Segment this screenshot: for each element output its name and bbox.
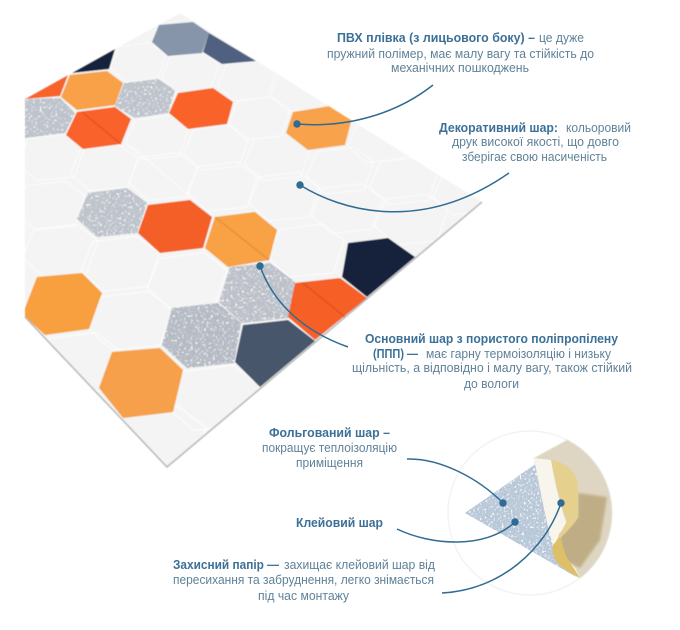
callout text: polypropylene base layer: щільність, а відповідно і малу вагу, також стійкий [352, 360, 632, 375]
panel: hexagon wall panel [15, 13, 503, 475]
arrow: decorative layer leader [296, 173, 509, 212]
callout text: PVC film: це дуже [539, 30, 584, 45]
panel surface [25, 13, 482, 467]
arrow: base layer leader [256, 262, 348, 347]
callout text: decorative layer: кольоровий [566, 120, 631, 135]
paper curl lower lobe [553, 537, 580, 578]
arrow: adhesive layer leader [397, 518, 519, 542]
callout text: decorative layer: Декоративний шар: [439, 120, 558, 135]
textured paper shadow [560, 493, 607, 568]
coloured hexagons [25, 22, 415, 418]
callout text: polypropylene base layer: має гарну термоізоляцію і низьку [426, 346, 611, 361]
callout text: decorative layer [439, 120, 631, 164]
callout text: protective paper: захищає клейовий шар від [284, 557, 435, 572]
peeled white strip [534, 458, 567, 545]
arrow: PVC film leader [293, 85, 433, 128]
white hexagon relief grid [83, 194, 206, 430]
arrow: foil layer leader [407, 459, 507, 507]
callout text: foil layer: Фольгований шар – [269, 425, 390, 440]
callout text: PVC film: пружний полімер, має малу вагу та стійкість до [327, 46, 594, 61]
magnifier ring [448, 431, 612, 595]
callout text: protective paper [173, 557, 435, 603]
callout text: PVC film [327, 30, 594, 75]
callout text: foil layer: приміщення [296, 455, 363, 470]
curled adhesive paper [551, 460, 578, 545]
callout text: polypropylene base layer: до вологи [464, 376, 519, 391]
callout text: foil layer [262, 425, 397, 470]
callout text: PVC film: ПВХ плівка (з лицьового боку) – [337, 30, 535, 45]
callout text: decorative layer: зберігає свою насиченість [462, 149, 607, 164]
arrow: protective paper leader [442, 499, 565, 593]
callout text: polypropylene base layer: (ППП) — [373, 346, 418, 361]
callout text: adhesive layer: Клейовий шар [296, 515, 383, 530]
foil layer [465, 463, 578, 578]
callout text: protective paper: під час монтажу [258, 588, 349, 603]
callout text: PVC film: механічних пошкоджень [391, 60, 529, 75]
beige backing paper [534, 440, 612, 578]
icon: magnified corner with peeled backing [448, 431, 612, 595]
callout text: polypropylene base layer [352, 331, 632, 391]
callout text: polypropylene base layer: Основний шар з пористого поліпропілену [365, 331, 619, 346]
callout text: protective paper: пересихання та забруднення, легко знімається [173, 572, 434, 587]
callout text: decorative layer: друк високої якості, що довго [452, 134, 619, 149]
panel edge thickness [25, 202, 482, 467]
callout text: protective paper: Захисний папір — [173, 557, 279, 572]
callout text: foil layer: покращує теплоізоляцію [262, 440, 397, 455]
